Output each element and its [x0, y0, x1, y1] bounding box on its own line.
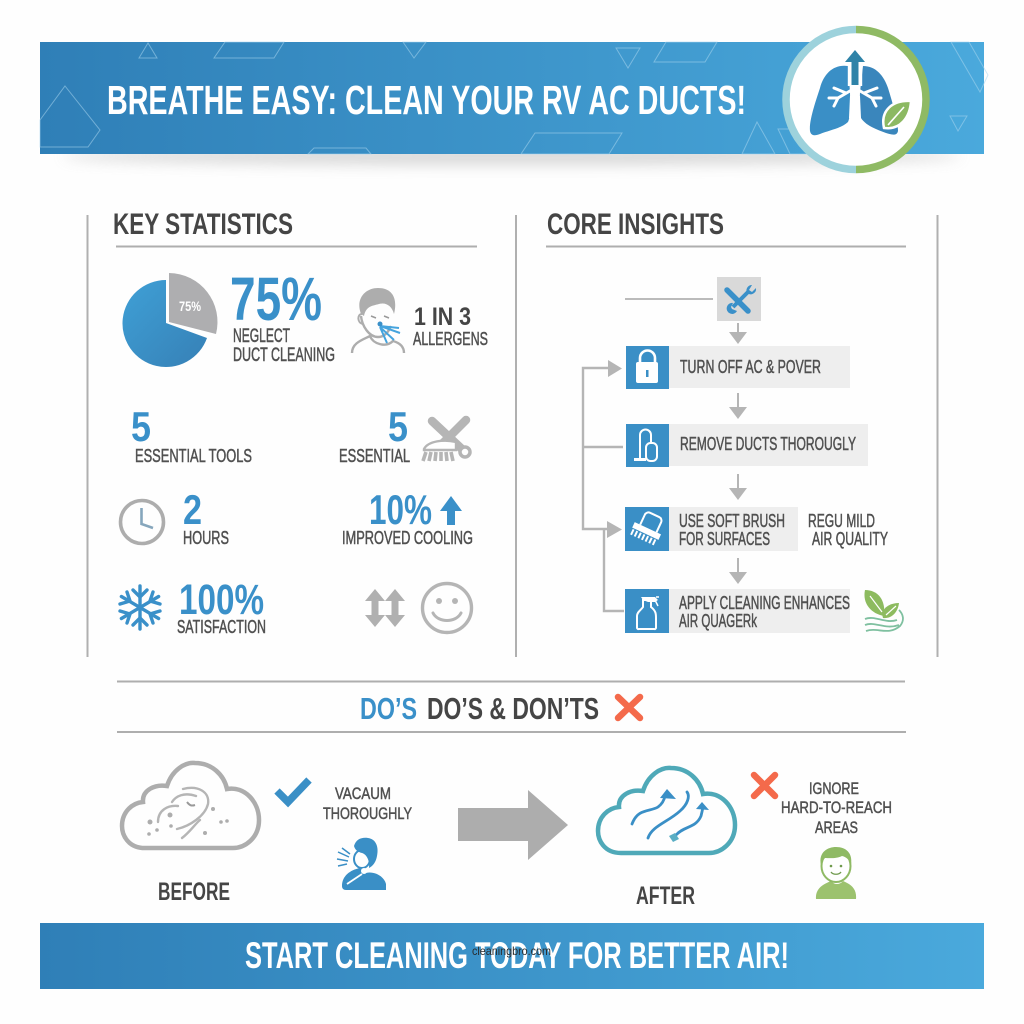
icon: person with mask [337, 838, 386, 890]
label: ignore hard-to-reach areas [781, 779, 892, 837]
heading: do's and don'ts: DO’S [360, 691, 417, 726]
label: after: AFTER [636, 882, 695, 910]
label: vacuum thoroughly: VACAUM [335, 784, 391, 803]
stat: 1 in 3 allergens: ALLERGENS [413, 329, 488, 349]
label: ignore hard-to-reach areas: AREAS [815, 818, 858, 837]
step: use soft brush [625, 507, 798, 551]
stat: 5 essential tools: ESSENTIAL TOOLS [135, 446, 252, 466]
stat: 75% neglect duct cleaning: NEGLECT [233, 326, 290, 347]
stat: 100% satisfaction [177, 576, 266, 637]
icon: clock [120, 500, 164, 544]
stat: 5 essential tools [131, 403, 252, 466]
stat: 100% satisfaction: 100% [179, 576, 264, 624]
stat: 10% improved cooling: IMPROVED COOLING [342, 528, 473, 548]
stat: 5 essential: ESSENTIAL [339, 446, 410, 466]
icon: up and down arrows [365, 589, 405, 627]
header banner [40, 42, 988, 165]
heading: do's and don'ts: DO’S & DON’TS [427, 691, 599, 726]
stat: 5 essential: 5 [388, 403, 408, 450]
stat: 2 hours [183, 486, 229, 548]
stat: 5 essential tools: 5 [131, 403, 151, 450]
icon: smiley [422, 584, 472, 632]
stat: 75% neglect duct cleaning [230, 265, 335, 366]
pie chart: 75% [122, 273, 217, 367]
stat: 10% improved cooling: 10% [369, 486, 432, 533]
watermark: cleaningbro.com [472, 944, 551, 958]
heading: key statistics: KEY STATISTICS [113, 208, 293, 241]
icon: crossed tools [717, 277, 761, 321]
label: vacuum thoroughly: THOROUGHLY [323, 804, 412, 823]
stat: 75% neglect duct cleaning: 75% [230, 265, 322, 333]
arrow: before to after [458, 790, 568, 860]
heading: do's and don'ts [360, 691, 599, 726]
step: apply cleaning: AIR QUAGERk [679, 611, 758, 631]
icon: sneezing person [352, 288, 404, 353]
icon: snowflake [120, 586, 160, 629]
heading: core insights: CORE INSIGHTS [547, 208, 724, 241]
stat: 100% satisfaction: SATISFACTION [177, 617, 266, 637]
label: before: BEFORE [158, 878, 230, 906]
icon: brush and tools [423, 420, 470, 461]
icon: red cross heading [618, 697, 640, 718]
step: remove ducts [626, 424, 868, 467]
icon: blue check [277, 780, 309, 802]
pie chart: 75%: 75% [179, 298, 201, 314]
icon: red cross [754, 775, 775, 796]
side note: air quality: REGU MILD [808, 511, 875, 531]
panel: core insights [546, 208, 906, 633]
flow arrows [583, 323, 747, 611]
footer call to action: START CLEANING TODAY FOR BETTER AIR! [245, 935, 789, 976]
footer banner [40, 923, 984, 989]
icon: dirty cloud before [122, 763, 259, 848]
step: remove ducts: REMOVE DUCTS THOROUGLY [680, 434, 856, 454]
side note: air quality [808, 511, 888, 549]
stat: 2 hours: HOURS [183, 528, 229, 548]
icon: green leaves and air [864, 590, 903, 631]
stat: 1 in 3 allergens: 1 IN 3 [414, 303, 471, 331]
stat: 2 hours: 2 [183, 486, 202, 533]
panel: key statistics [88, 208, 938, 657]
step: turn off AC and power: TURN OFF AC & POVER [680, 357, 821, 377]
stat: 75% neglect duct cleaning: DUCT CLEANING [233, 345, 335, 366]
label: vacuum thoroughly [323, 784, 412, 823]
step: use soft brush: FOR SURFACES [679, 529, 770, 549]
step: apply cleaning: APPLY CLEANING ENHANCES [679, 593, 850, 613]
panel: do's and don'ts [117, 682, 906, 910]
icon: clean cloud after [598, 768, 735, 853]
step: turn off AC and power [626, 346, 850, 389]
icon: happy green person [816, 847, 856, 899]
step: use soft brush: USE SOFT BRUSH [679, 511, 785, 531]
label: ignore hard-to-reach areas: IGNORE [809, 779, 859, 798]
side note: air quality: AIR QUALITY [812, 529, 888, 549]
stat: 5 essential [339, 403, 410, 466]
stat: 1 in 3 allergens [413, 303, 488, 349]
title: BREATHE EASY: CLEAN YOUR RV AC DUCTS! [107, 77, 746, 123]
icon: lungs badge [786, 30, 926, 170]
stat: 10% improved cooling [342, 486, 473, 548]
step: apply cleaning [625, 589, 850, 633]
label: ignore hard-to-reach areas: HARD-TO-REACH [781, 798, 892, 817]
